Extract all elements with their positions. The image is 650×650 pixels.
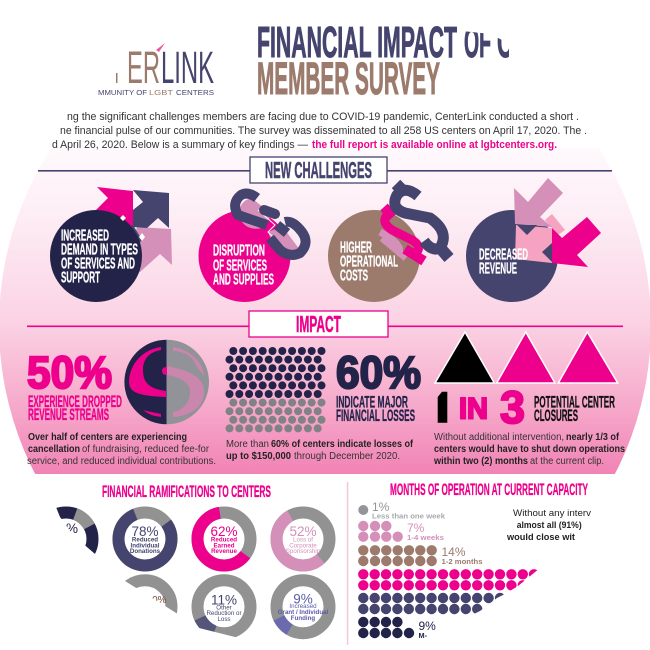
group: 7 percent: 7% [407, 521, 425, 535]
text: without any intervention [506, 508, 591, 543]
logo: CenterLink: CENTERS [176, 88, 214, 97]
text: without any intervention: would close wit [506, 532, 576, 543]
challenge: increased demand: DEMAND IN TYPES [61, 242, 138, 258]
group: 7 percent: 1-4 weeks [407, 533, 444, 542]
heading: impact: IMPACT [296, 311, 341, 337]
stat: 60%: INDICATE MAJOR [336, 392, 408, 412]
challenge: decreased revenue: DECREASED [479, 246, 528, 264]
heading: new challenges [38, 157, 612, 183]
text: closures [433, 432, 625, 467]
challenge: disruption: DISRUPTION [213, 242, 265, 260]
group: 1 percent: 1% [372, 500, 390, 514]
challenge: increased demand: OF SERVICES AND [61, 256, 135, 272]
logo: CenterLink: LGBT [149, 88, 174, 97]
group: pink and navy dots [358, 568, 650, 650]
donut: 62%: Reduced [211, 536, 237, 544]
text: losses: 60% of centers indicate losses of [271, 439, 414, 450]
stat: 1 in 3: 3 [500, 382, 525, 433]
stat: 1 in 3 [438, 382, 615, 433]
stat: 50%: 50% [27, 347, 112, 398]
infographic: FINANCIAL RAMIFICATIONS TO CENTERS [102, 482, 271, 501]
donut: 52%: Corporate [289, 542, 317, 550]
donut: 78%: Donations [130, 548, 161, 555]
intro text: the full report is available online at lgbtcenters.org. [312, 139, 557, 151]
text: closures: Without additional intervention, [434, 432, 564, 443]
donut: clipped top left [0, 500, 100, 600]
dot grid: 60 percent [226, 347, 326, 432]
donut: 11% [180, 572, 259, 650]
group: 14 percent: 14% [442, 545, 466, 559]
text: without any intervention: almost all (91%) [517, 520, 582, 531]
text: revenue streams: Over half of centers are experiencing [28, 432, 187, 443]
text: without any intervention: Without any interv [513, 508, 591, 519]
text: closures: within two (2) months [433, 456, 528, 467]
challenge: increased demand [50, 187, 172, 302]
challenge: increased demand: INCREASED [61, 228, 109, 244]
group: 14 percent [358, 545, 482, 566]
stat: 1 in 3: CLOSURES [534, 406, 578, 425]
text: revenue streams: of fundraising, reduced fee-for [82, 444, 210, 455]
title: C [497, 18, 513, 67]
logo: CenterLink [98, 42, 214, 97]
infographic: EXPERIENCE DROPPED [28, 392, 122, 411]
donut: 78%: 78% [131, 524, 159, 539]
stat: 60%: 60% [336, 347, 421, 398]
stat: 60%: FINANCIAL LOSSES [336, 406, 415, 425]
text: losses [226, 439, 414, 462]
logo: CenterLink: LINK [161, 42, 214, 93]
challenge: disruption [198, 194, 306, 302]
text: closures: at the current clip. [530, 456, 604, 467]
text: revenue streams: service, and reduced individual contributions. [27, 456, 216, 467]
donut: 78%: Reduced [132, 536, 158, 544]
challenge: disruption: AND SUPPLIES [213, 272, 274, 288]
challenge: disruption: OF SERVICES [213, 258, 267, 274]
icon: dollar circle [124, 340, 209, 424]
icon: three triangles [435, 332, 618, 383]
stat: 1 in 3: IN [459, 392, 488, 426]
donut: 9%: Grant / Individual [278, 609, 329, 616]
group: 9 percent [358, 617, 436, 640]
group: 14 percent: 1-2 months [442, 557, 482, 566]
heading: impact [27, 311, 623, 337]
donut: 62% [187, 502, 261, 576]
donut: 9%: Increased [289, 603, 317, 610]
text: revenue streams: cancellation [28, 444, 80, 455]
challenge: decreased revenue: REVENUE [479, 260, 517, 278]
donut: 9%: 9% [293, 592, 313, 606]
text: revenue streams [27, 432, 216, 467]
logo: CenterLink: MMUNITY OF [98, 88, 147, 97]
text: losses: More than [226, 439, 269, 450]
donut: 62%: 62% [210, 524, 238, 539]
donut: 52% [266, 502, 340, 576]
title: OF [464, 18, 491, 67]
intro text: ng the significant challenges members are facing due to COVID-19 pandemic, CenterLink conducted a short . [67, 111, 579, 123]
donut: 78%: Individual [131, 542, 160, 550]
donut: 62%: Revenue [211, 548, 237, 555]
logo: CenterLink: ER [127, 42, 160, 93]
challenge: higher costs [328, 184, 449, 302]
donut: 9% [266, 570, 340, 643]
text: losses: through December 2020. [294, 451, 400, 462]
challenge: higher costs: HIGHER [340, 240, 372, 256]
title: MEMBER SURVEY [257, 53, 440, 104]
donut: 62%: Earned [214, 542, 235, 550]
group: 9 percent: 9% [418, 619, 436, 633]
intro text: d April 26, 2020. Below is a summary of key findings — [52, 139, 309, 151]
group: 9 percent: M- [418, 631, 428, 640]
donut: 52%: 52% [289, 524, 317, 539]
text: closures: nearly 1/3 of [566, 432, 620, 443]
pink gradient panel [0, 148, 650, 474]
text: closures: centers would have to shut down operations [434, 444, 625, 455]
intro text [52, 111, 587, 151]
donut: 9%: Funding [291, 615, 315, 622]
challenge: higher costs: COSTS [340, 268, 368, 284]
title [257, 18, 525, 104]
stat: 60% [336, 347, 421, 425]
donut: 11%: Other [216, 604, 232, 612]
stat: 50%: REVENUE STREAMS [28, 405, 109, 424]
group: 1 percent: Less than one week [372, 512, 446, 520]
donut: clipped top left: % [66, 521, 78, 536]
stat: 50% [27, 347, 122, 424]
donut: 78% [108, 502, 182, 576]
intro text: ne financial pulse of our communities. The survey was disseminated to all 258 US centers on April 17, 2020. The . [60, 125, 587, 137]
challenge: higher costs: OPERATIONAL [340, 254, 398, 270]
donut: 52%: Loss of [293, 536, 313, 544]
group: 7 percent [358, 521, 444, 542]
donut: 52%: Sponsorship [286, 548, 321, 555]
donut: clipped lower left: - 0% [146, 595, 167, 606]
heading: new challenges: NEW CHALLENGES [265, 157, 372, 183]
group: 1 percent [358, 500, 446, 520]
donut: clipped lower left [100, 560, 182, 650]
donut: 11%: Loss [217, 616, 231, 623]
challenge: increased demand: SUPPORT [61, 270, 100, 286]
text: losses: up to $150,000 [226, 451, 291, 462]
donut: 11%: 11% [211, 592, 237, 608]
donut: 11%: Reduction or [206, 610, 242, 617]
challenge: decreased revenue [466, 178, 601, 302]
divider [347, 482, 348, 645]
